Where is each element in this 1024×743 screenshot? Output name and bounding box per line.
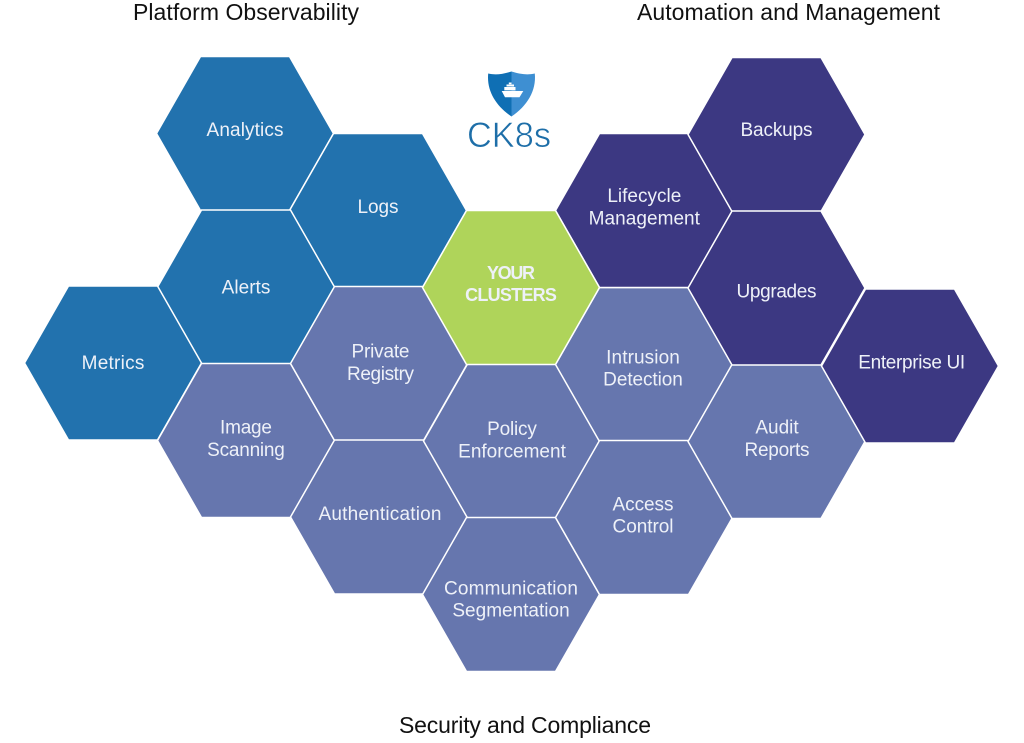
hexagon: Enterprise UI: Enterprise UI <box>858 352 965 373</box>
hexagon: Access Control: Control <box>612 517 674 538</box>
hexagon: Backups <box>688 58 865 212</box>
hexagon: Audit Reports: Audit <box>755 418 799 439</box>
hexagon: Communication Segmentation <box>422 518 600 672</box>
hexagon: Your Clusters: YOUR <box>487 263 535 283</box>
hexagon: Analytics: Analytics <box>206 120 284 141</box>
logo wordmark: CK8s <box>467 116 551 155</box>
hexagon: Image Scanning: Scanning <box>207 440 285 461</box>
icon: shield with ship <box>488 72 535 116</box>
hexagon: Analytics <box>156 56 334 210</box>
hexagon: Policy Enforcement <box>424 364 600 518</box>
hexagon: Your Clusters <box>422 210 600 364</box>
hexagon: Intrusion Detection <box>556 288 732 442</box>
hexagon: Intrusion Detection: Intrusion <box>606 347 680 368</box>
hexagon: Audit Reports <box>688 364 865 518</box>
hexagon: Lifecycle Management: Lifecycle <box>607 186 681 207</box>
hexagon: Policy Enforcement: Policy <box>487 419 537 440</box>
hexagon: Private Registry: Registry <box>347 364 414 385</box>
hexagon: Alerts <box>158 210 334 364</box>
hexagon: Image Scanning <box>158 364 334 518</box>
hexagon: Your Clusters: CLUSTERS <box>465 285 557 305</box>
hexagon: Logs: Logs <box>358 197 398 218</box>
hexagon: Upgrades <box>688 211 865 365</box>
hexagon: Alerts: Alerts <box>222 277 270 298</box>
hexagon: Metrics: Metrics <box>82 353 144 374</box>
hexagon: Backups: Backups <box>740 120 812 141</box>
hexagon: Image Scanning: Image <box>220 417 272 438</box>
hexagon: Intrusion Detection: Detection <box>603 369 683 390</box>
logo: CK8s <box>467 72 551 155</box>
hexagon: Communication Segmentation: Communication <box>444 578 578 599</box>
hexagon: Authentication <box>290 440 468 594</box>
hexagon: Access Control <box>556 440 732 594</box>
hexagon: Communication Segmentation: Segmentation <box>452 601 570 622</box>
hexagon: Private Registry: Private <box>352 342 410 363</box>
hexagon: Logs <box>290 134 466 288</box>
hexagon: Access Control: Access <box>612 495 674 516</box>
hexagon: Lifecycle Management <box>556 134 732 288</box>
hexagon: Metrics <box>24 286 202 440</box>
hexagon: Upgrades: Upgrades <box>736 281 816 302</box>
hexagon: Enterprise UI <box>822 289 998 443</box>
hexagon: Authentication: Authentication <box>318 504 442 525</box>
hexagon: Audit Reports: Reports <box>744 440 810 461</box>
hexagon: Lifecycle Management: Management <box>589 209 701 230</box>
hexagon: Policy Enforcement: Enforcement <box>458 441 567 462</box>
hexagon: Private Registry <box>290 286 468 440</box>
heading: Security and Compliance: Security and Compliance <box>399 712 651 738</box>
